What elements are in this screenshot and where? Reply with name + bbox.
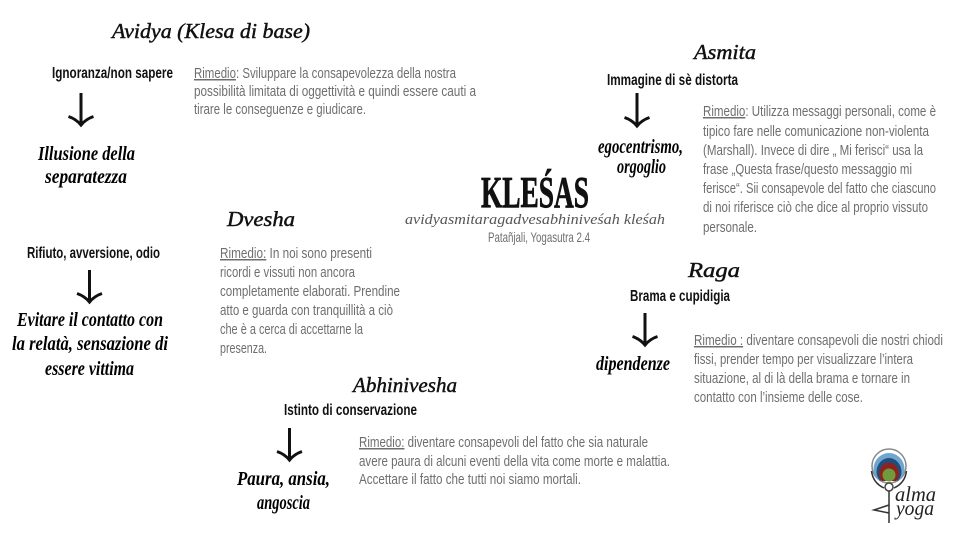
remedy text: Asmita <box>703 103 936 236</box>
heading: Dvesha: Dvesha <box>226 207 295 231</box>
remedy text: Dvesha: ricordi e vissuti non ancora <box>220 264 355 281</box>
consequence: Evitare il contatto: essere vittima <box>45 358 134 380</box>
heading: Raga: Raga <box>687 258 740 282</box>
heading: Avidya: Avidya (Klesa di base) <box>110 19 310 43</box>
subheading: Brama e cupidigia: Brama e cupidigia <box>630 288 730 305</box>
panel: Abhinivesha <box>236 373 670 514</box>
arrow: Brama to dipendenze <box>632 313 658 345</box>
remedy text: Avidya <box>194 65 477 118</box>
consequence: egocentrismo, orgoglio: orgoglio <box>617 156 666 178</box>
remedy text: Dvesha <box>220 245 400 357</box>
arrow: Ignoranza to Illusione <box>68 93 94 125</box>
remedy text: Avidya: Rimedio: Sviluppare la consapevolezza della nostra <box>194 65 456 82</box>
consequence: egocentrismo, orgoglio: egocentrismo, <box>598 136 683 158</box>
remedy text: Abhinivesha: Accettare il fatto che tutti noi siamo mortali. <box>359 471 581 488</box>
consequence: Paura, ansia, angoscia <box>236 468 330 514</box>
logo: alma yoga <box>872 449 936 523</box>
subtitle: Sanskrit sutra: avidyasmitaragadvesabhiniveśah kleśah <box>405 212 665 228</box>
remedy text: Raga <box>694 332 943 406</box>
consequence: Evitare il contatto: la relatà, sensazione di <box>12 333 168 355</box>
subheading: Ignoranza: Ignoranza/non sapere <box>52 65 173 82</box>
subheading: Istinto di conservazione: Istinto di conservazione <box>284 402 417 419</box>
consequence: Evitare il contatto: Evitare il contatto con <box>16 309 163 331</box>
remedy text: Raga: contatto con l’insieme delle cose. <box>694 389 863 406</box>
consequence: dipendenze: dipendenze <box>596 353 670 375</box>
remedy text: Dvesha: presenza. <box>220 340 267 357</box>
remedy text: Abhinivesha: avere paura di alcuni eventi della vita come morte e malattia. <box>359 453 670 470</box>
consequence: Paura, ansia, angoscia: angoscia <box>257 492 310 514</box>
remedy text: Avidya: possibilità limitata di oggettività e quindi essere cauti a <box>194 83 477 100</box>
panel: Avidya <box>37 19 477 188</box>
remedy text: Asmita: personale. <box>703 219 757 236</box>
heading: Abhinivesha: Abhinivesha <box>351 373 457 397</box>
subheading: Immagine di sè distorta: Immagine di sè distorta <box>607 72 738 89</box>
remedy text: Abhinivesha: Rimedio: diventare consapevoli del fatto che sia naturale <box>359 434 648 451</box>
heading: Asmita: Asmita <box>692 40 756 64</box>
consequence: egocentrismo, orgoglio <box>598 136 683 178</box>
remedy text: Dvesha: completamente elaborati. Prendine <box>220 283 400 300</box>
panel: Asmita <box>598 40 936 236</box>
consequence: Evitare il contatto <box>12 309 168 380</box>
remedy text: Dvesha: che è a cerca di accettarne la <box>220 321 363 338</box>
arrow: Immagine to egocentrismo <box>624 93 650 126</box>
consequence: Illusione della separatezza <box>37 143 135 188</box>
remedy text: Avidya: tirare le conseguenze e giudicare. <box>194 101 366 118</box>
title: Kleśas: KLEŚAS <box>481 168 589 217</box>
logo: alma yoga: yoga <box>894 496 934 520</box>
arrow: Rifiuto to Evitare <box>77 270 102 302</box>
panel: central title <box>405 168 665 245</box>
arrow: Istinto to Paura <box>277 428 302 460</box>
consequence: Paura, ansia, angoscia: Paura, ansia, <box>236 468 330 490</box>
panel: Dvesha <box>12 207 400 380</box>
remedy text: Dvesha: atto e guarda con tranquillità a ciò <box>220 302 393 319</box>
consequence: Illusione della separatezza: Illusione della <box>37 143 135 165</box>
remedy text: Dvesha: Rimedio: In noi sono presenti <box>220 245 372 262</box>
remedy text: Abhinivesha <box>359 434 670 488</box>
logo: alma yoga: alma <box>895 482 936 506</box>
consequence: Illusione della separatezza: separatezza <box>44 166 127 188</box>
source: Patañjali: Patañjali, Yogasutra 2.4 <box>488 229 590 245</box>
panel: Raga <box>596 258 943 406</box>
subheading: Rifiuto: Rifiuto, avversione, odio <box>27 245 160 262</box>
